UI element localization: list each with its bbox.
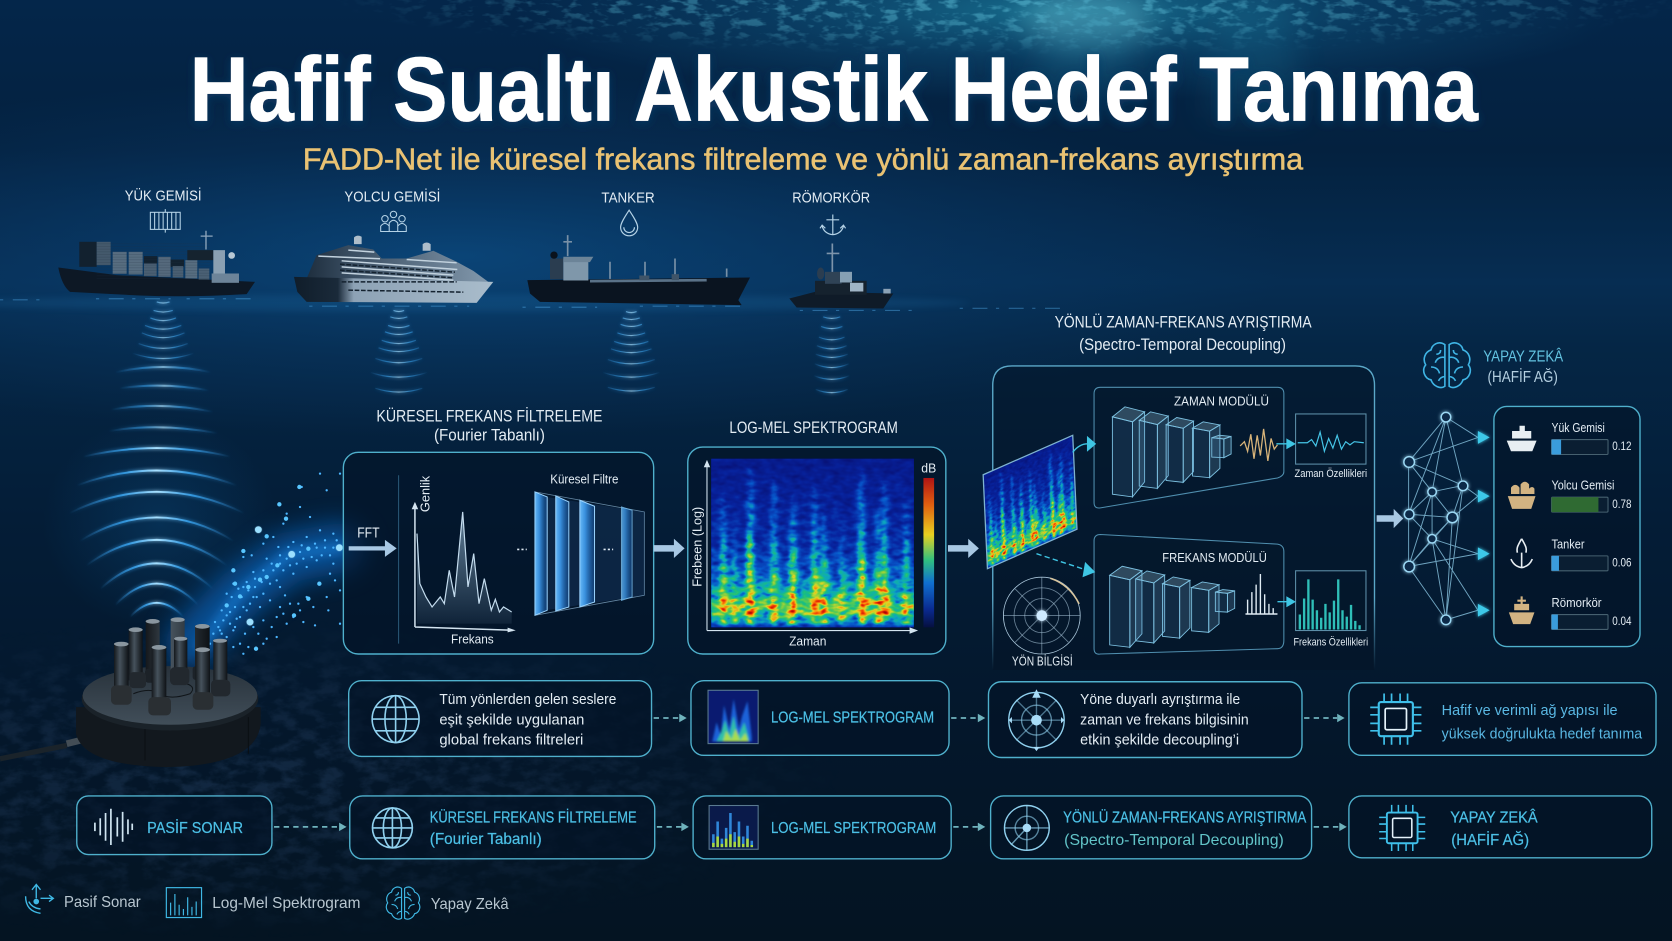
title: Hafif Sualtı Akustik Hedef Tanıma <box>190 40 1478 141</box>
legend label: spectrogram: Log-Mel Spektrogram <box>212 895 360 912</box>
colorbar label: dB <box>921 461 936 476</box>
arrows: sound ripples under ships <box>132 302 850 393</box>
card frame <box>1349 796 1652 858</box>
arrow: row 2 d <box>1314 823 1347 831</box>
mini spectrogram <box>709 806 758 849</box>
class: tug <box>1509 595 1632 629</box>
subtitle: FADD-Net ile küresel frekans filtreleme ve yönlü zaman-frekans ayrıştırma <box>303 142 1304 177</box>
icon: globe <box>372 808 412 848</box>
bar <box>1552 497 1608 512</box>
description: eşit şekilde uygulanan <box>439 712 584 728</box>
cargo ship hull and containers <box>58 231 255 296</box>
label: LOG-MEL SPEKTROGRAM <box>771 709 934 726</box>
module title: FREKANS MODÜLÜ <box>1162 550 1267 565</box>
label: light network: (HAFİF AĞ) <box>1488 367 1558 386</box>
icon: chip <box>1370 693 1421 745</box>
illustration: filter slabs <box>535 492 644 615</box>
legend icon: passive sonar <box>26 884 53 913</box>
axis arrowheads <box>704 460 918 634</box>
row 2 card: decoupling <box>991 796 1312 859</box>
panel: classification output <box>1494 406 1640 647</box>
panel: global frequency filtering <box>343 406 654 654</box>
axis label: Genlik: Genlik <box>418 475 433 512</box>
icon: radar <box>1004 806 1049 850</box>
value: 0.06 <box>1612 557 1631 570</box>
label: LOG-MEL SPEKTROGRAM <box>771 820 936 837</box>
legend label: passive sonar: Pasif Sonar <box>64 894 141 911</box>
label: PASİF SONAR <box>147 818 243 837</box>
row 2 card: AI <box>1349 796 1652 858</box>
card frame <box>693 796 951 859</box>
arrow: decoupling to network <box>1377 509 1403 528</box>
chart: heatmap <box>711 459 914 627</box>
arrow: row 2 b <box>657 823 689 831</box>
module: time <box>1094 387 1367 508</box>
icon: globe <box>372 696 419 743</box>
axis label: time: Zaman <box>789 633 826 648</box>
description: Hafif ve verimli ağ yapısı ile <box>1442 702 1618 719</box>
label line 2: (HAFİF AĞ) <box>1451 830 1529 849</box>
label: direction info: YÖN BİLGİSİ <box>1012 654 1073 669</box>
class: cargo <box>1507 420 1631 454</box>
heading: KÜRESEL FREKANS FİLTRELEME <box>376 406 602 425</box>
panel frame <box>688 447 946 654</box>
row 1 card: light network description <box>1349 683 1656 755</box>
description: global frekans filtreleri <box>439 733 583 749</box>
axes <box>707 465 915 631</box>
mini spectrogram <box>708 690 758 744</box>
arrow: filter to spectrogram <box>654 539 685 558</box>
label: tanker: TANKER <box>601 190 655 207</box>
card frame <box>991 796 1312 859</box>
arrow: row 1 b <box>951 714 985 722</box>
neural network diagram <box>1404 412 1490 625</box>
value: 0.04 <box>1612 615 1632 628</box>
icon: container <box>150 209 180 233</box>
feature label: frequency: Frekans Özellikleri <box>1293 636 1368 648</box>
arrow: row 1 a <box>654 714 687 722</box>
sonar particles stream <box>190 474 340 654</box>
label line 2: (Spectro-Temporal Decoupling) <box>1064 832 1284 849</box>
card frame <box>691 681 949 755</box>
subheading: (Spectro-Temporal Decoupling) <box>1079 335 1286 354</box>
legend icon: spectrogram <box>166 888 202 918</box>
card frame <box>350 796 655 859</box>
icon: drop <box>621 210 638 236</box>
row 1 card: log-mel <box>691 681 949 755</box>
subheading: (Fourier Tabanlı) <box>434 426 545 445</box>
legend <box>26 884 509 919</box>
card frame <box>988 682 1302 757</box>
description <box>1442 702 1643 742</box>
tug icon <box>1509 596 1534 624</box>
arrow: FFT <box>349 540 397 557</box>
arrow: row 2 c <box>953 823 985 831</box>
panel: directional time-frequency decoupling <box>983 313 1374 670</box>
feature label: time: Zaman Özellikleri <box>1295 468 1367 480</box>
description <box>439 692 616 749</box>
axis label: Frekans: Frekans <box>451 631 494 646</box>
card frame <box>77 796 272 855</box>
ship: tug <box>789 189 893 309</box>
icon: radar direction <box>1003 577 1080 654</box>
heading: YÖNLÜ ZAMAN-FREKANS AYRIŞTIRMA <box>1055 313 1312 332</box>
label line 1: YAPAY ZEKÂ <box>1450 808 1538 827</box>
arrow: row 2 a <box>274 823 347 831</box>
description: yüksek doğrulukta hedef tanıma <box>1442 725 1643 742</box>
mini bars <box>1245 574 1277 614</box>
description: Tüm yönlerden gelen seslere <box>439 692 616 708</box>
chart: amplitude spectrum <box>399 475 516 644</box>
description: Yöne duyarlı ayrıştırma ile <box>1080 692 1240 708</box>
arrow: spectrogram to decoupling <box>948 539 979 558</box>
bar <box>1552 440 1608 454</box>
tanker hull and bridge <box>527 235 750 305</box>
card frame <box>349 681 652 756</box>
row 2 card: passive sonar <box>77 796 272 855</box>
panel frame <box>343 452 654 654</box>
class: passenger <box>1508 478 1632 512</box>
heading: LOG-MEL SPEKTROGRAM <box>729 418 898 437</box>
panel: log-mel spectrogram <box>688 418 946 654</box>
feature box: frequency <box>1296 571 1366 631</box>
class name: Römorkör <box>1552 595 1602 610</box>
value: 0.78 <box>1612 498 1632 511</box>
legend label: AI: Yapay Zekâ <box>431 896 509 913</box>
row 2 card: global filtering <box>350 796 655 859</box>
CNN blocks <box>1110 566 1235 647</box>
ship: tanker <box>527 190 750 305</box>
people icon <box>1508 482 1536 509</box>
icon: sound wave <box>95 809 132 845</box>
icon: brain <box>1424 343 1470 387</box>
row 1 card: global filters description <box>349 681 652 756</box>
arrows: module connectors <box>1036 437 1295 606</box>
label line 1: KÜRESEL FREKANS FİLTRELEME <box>430 809 637 827</box>
module frame <box>1094 387 1284 508</box>
panel frame <box>993 366 1374 670</box>
sonar array device <box>0 617 261 767</box>
module: frequency <box>1094 535 1368 654</box>
value: 0.12 <box>1612 440 1631 453</box>
panel frame <box>1494 406 1640 647</box>
tanker icon <box>1511 539 1532 568</box>
bar <box>1552 615 1608 629</box>
description <box>1080 692 1249 749</box>
feature box: time <box>1296 414 1366 464</box>
FFT label: FFT <box>357 526 380 542</box>
arrows: sonar dome waves <box>69 367 244 617</box>
ship: cargo <box>58 187 255 296</box>
label line 2: (Fourier Tabanlı) <box>430 831 542 848</box>
card frame <box>1349 683 1656 755</box>
module frame <box>1094 535 1284 654</box>
label: passenger ship: YOLCU GEMİSİ <box>344 188 440 206</box>
module title: ZAMAN MODÜLÜ <box>1174 393 1269 408</box>
colorbar <box>923 478 934 627</box>
label: global filter: Küresel Filtre <box>550 471 618 486</box>
description: zaman ve frekans bilgisinin <box>1080 712 1249 728</box>
class name: Yolcu Gemisi <box>1552 478 1614 493</box>
axis label: frequency: Frebeen (Log) <box>690 507 705 587</box>
passenger ship hull and decks <box>294 236 493 303</box>
legend icon: brain <box>386 887 420 919</box>
label: tug: RÖMORKÖR <box>792 189 870 207</box>
class: tanker <box>1511 536 1631 571</box>
arrow: row 1 c <box>1304 714 1345 722</box>
bar <box>1552 556 1608 571</box>
icon: people <box>381 211 406 232</box>
CNN blocks <box>1112 407 1231 497</box>
icon: chip <box>1379 805 1425 851</box>
tug hull and bridge <box>789 243 893 309</box>
label: artificial intelligence: YAPAY ZEKÂ <box>1483 347 1564 366</box>
ship: passenger <box>294 188 493 303</box>
label: cargo ship: YÜK GEMİSİ <box>125 187 202 205</box>
gold waveform <box>1240 429 1277 461</box>
ship icon <box>1507 426 1537 451</box>
icon: radar <box>1009 689 1064 751</box>
row 2 card: log-mel <box>693 796 951 859</box>
icon: anchor <box>820 214 846 235</box>
row 1 card: decoupling description <box>988 682 1302 757</box>
class name: Yük Gemisi <box>1552 420 1605 435</box>
class name: Tanker <box>1552 536 1585 551</box>
label line 1: YÖNLÜ ZAMAN-FREKANS AYRIŞTIRMA <box>1063 809 1307 827</box>
water surface sparkle <box>0 299 1066 310</box>
description: etkin şekilde decoupling’i <box>1080 733 1239 749</box>
tilted spectrogram <box>983 435 1077 569</box>
ellipsis marks <box>517 548 613 550</box>
